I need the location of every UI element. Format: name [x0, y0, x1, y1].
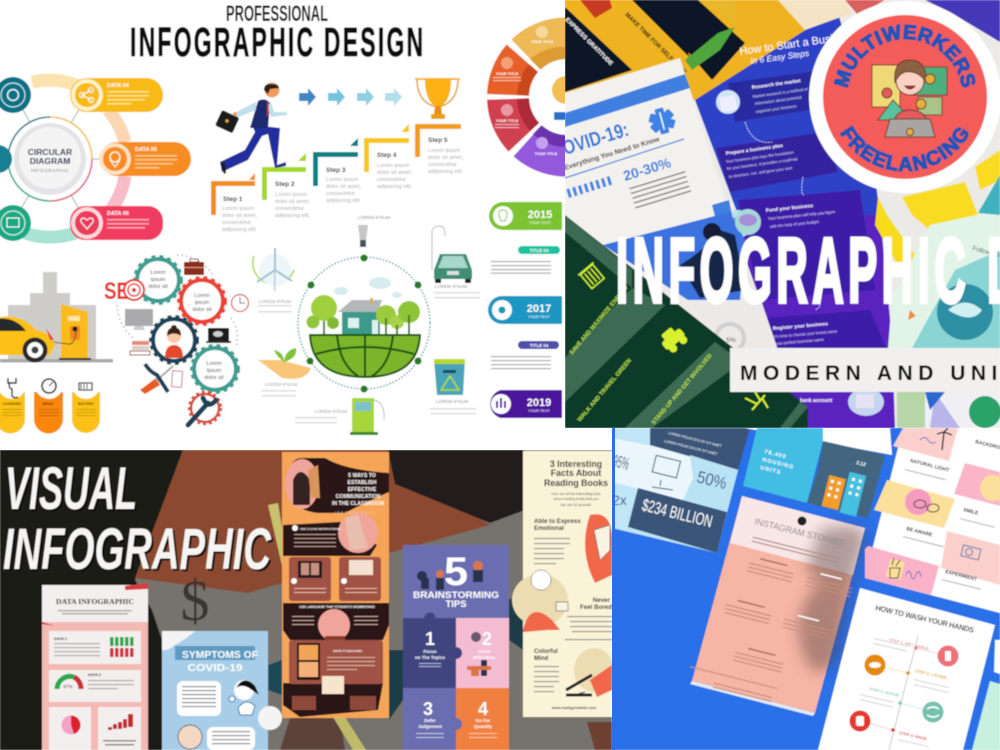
- puzzle piece 2: Wild Ideas: [473, 655, 496, 660]
- panel: visual infographic: INFOGRAPHIC: [3, 517, 272, 582]
- poster: 3 interesting facts about reading books: Facts About: [551, 468, 601, 478]
- circular diagram: INFOGRAPHIC: [31, 168, 69, 173]
- cell: camera: [941, 531, 1000, 585]
- lorem captions: LOREM IPSUM: [435, 284, 467, 289]
- covid card: OVID-19:: [560, 119, 631, 160]
- lorem captions: LOREM IPSUM: [436, 399, 468, 404]
- title: infographic: INFOGRAPHIC: [5, 519, 274, 584]
- gear: red: Lorem: [194, 293, 210, 299]
- step 4: consectetur: [377, 177, 406, 183]
- icon: tree: [745, 392, 768, 410]
- segment: yellow: [511, 16, 565, 70]
- puzzle piece 2: [450, 618, 509, 688]
- stat: $234 billion: $234 BILLION: [640, 495, 714, 531]
- gear: red: [178, 278, 226, 324]
- step: register your business: your perfect business name: [775, 337, 825, 346]
- icon: bulb: [358, 225, 368, 247]
- icon: recycle trash: [578, 262, 606, 290]
- capsule: battery: BATTERY: [78, 402, 95, 406]
- step 2: Lorem ipsum: [275, 192, 308, 198]
- data 04 pill: [70, 78, 163, 112]
- lorem captions: LOREM IPSUM: [265, 382, 297, 387]
- arrows: [299, 88, 402, 106]
- logo text: multiwerkers: MULTIWERKERS: [832, 23, 976, 89]
- section: data 2: 67%: [63, 684, 73, 689]
- icon: green car: [432, 226, 472, 283]
- statistics card: 50%: [695, 467, 729, 493]
- title: visual: VISUAL: [7, 457, 139, 524]
- big number five: 5: [444, 550, 468, 594]
- step 5: adipiscing elit.: [428, 169, 464, 175]
- speech bubble: [177, 681, 221, 716]
- poster: 3 interesting facts about reading books: can use for yourself.: [560, 503, 592, 507]
- step 3: Step 3: [326, 167, 346, 174]
- poster: data infographic: [42, 583, 148, 750]
- gear: teal top: Lorem: [150, 270, 166, 276]
- step 5: Lorem ipsum: [428, 148, 461, 154]
- capsule: speed: SPEED: [42, 402, 54, 406]
- capsule: charging: CHARGING: [3, 402, 22, 406]
- step 2: Step 2: [275, 181, 295, 188]
- poster: 3 interesting facts about reading books: Reading Books: [544, 478, 608, 488]
- green eco leaflet: SAVE AND MAXIMIZE ENERGY: [569, 285, 630, 356]
- yellow and dark leaflet: MAKE TIME FOR SELF-CARE: [624, 12, 687, 76]
- puzzle piece 4: [450, 688, 509, 750]
- lorem captions: [258, 215, 480, 424]
- icon: laptop: [206, 328, 231, 343]
- covid card: [560, 58, 732, 258]
- step 1: consectetur: [222, 220, 251, 226]
- cell: peace hand: [865, 546, 939, 595]
- poster: 3 interesting facts about reading books: Feel Bored: [580, 604, 612, 611]
- icon: monitor: [125, 309, 153, 330]
- electric car charging: [0, 272, 113, 362]
- blue card with person: [603, 209, 761, 300]
- 2019 banner: [490, 390, 562, 418]
- cell: yellow glasses: [874, 480, 955, 528]
- segment: purple: YOUR TITLE: [535, 152, 558, 156]
- trees and house: [306, 295, 420, 335]
- icon: hand with plant: [258, 348, 311, 379]
- heading: ESTABLISH: [347, 480, 377, 486]
- timeline: [488, 202, 562, 418]
- puzzle piece 1: 1: [425, 629, 435, 649]
- step: prepare a business plan: for your business. It provides a roadmap: [726, 156, 799, 171]
- step 2: consectetur: [275, 206, 304, 212]
- cell labels: SMILE: [963, 507, 979, 517]
- gear: teal lower: Ipsum: [207, 368, 222, 374]
- illustration: reader on chair: [585, 514, 612, 583]
- step: research the market: organize your business: [755, 103, 797, 114]
- green eco leaflet: [565, 215, 808, 428]
- title pill teal: [491, 246, 560, 274]
- title pill purple: [491, 341, 559, 369]
- feature capsules: [0, 371, 100, 434]
- poster: 5 ways to establish communication: MAKE IT ENGAGING: [333, 649, 363, 653]
- puzzle piece 4: Quantity: [474, 724, 493, 729]
- chart: bar: [98, 707, 141, 750]
- step 1: dolor sit amet,: [222, 213, 258, 219]
- step 3: adipiscing elit.: [326, 198, 362, 204]
- step 1: Lorem ipsum: [222, 206, 255, 212]
- doughnut note card: [640, 300, 778, 360]
- globe hemisphere: [310, 335, 420, 377]
- panel: visual infographic: VISUAL: [5, 455, 137, 522]
- cell labels: BE AWARE: [906, 526, 933, 539]
- gear: teal lower: Lorem: [206, 361, 222, 367]
- icon: dry: [850, 710, 870, 732]
- step 4: [364, 124, 413, 190]
- puzzle piece 1: Focus: [423, 649, 437, 654]
- mint card: [972, 681, 1000, 750]
- housing units card: [743, 428, 892, 518]
- section: data 2: [49, 670, 141, 702]
- yellow and dark leaflet: [564, 0, 805, 100]
- housing units card: 2.12: [856, 460, 867, 468]
- step: research the market: information about potential: [754, 94, 802, 106]
- icon: freelancer character: [872, 60, 947, 137]
- gear: navy with person: [150, 316, 198, 364]
- icon: buildings: [821, 467, 866, 517]
- logo: multiwerkers freelancing: [808, 0, 1000, 193]
- step: prepare a business plan: [716, 132, 838, 192]
- icon: car: [657, 323, 690, 355]
- 2015 banner: 2015: [528, 209, 552, 221]
- puzzle piece 3: Judgement: [418, 724, 442, 729]
- panel: professional infographic design: [0, 0, 594, 450]
- title pill teal: TITLE 04: [530, 248, 549, 253]
- statistics card: 2x: [612, 492, 627, 508]
- bottom strip collage: bank account: [800, 398, 833, 404]
- puzzle piece 4: Go For: [476, 718, 491, 723]
- data 05 pill: DATA 05: [135, 147, 157, 153]
- cell labels: EXPERIMENT: [945, 569, 978, 583]
- heading: [332, 473, 384, 507]
- step: register your business: It's time to choose your brand name: [774, 328, 838, 339]
- statistics card: LOREM IPSUM DOLOR SIT AMET: [664, 439, 719, 456]
- white card corner: [994, 640, 1000, 674]
- icon: briefcase: [184, 259, 204, 275]
- tips grid card: [865, 428, 1000, 613]
- people illustration: [417, 561, 491, 676]
- puzzle piece 1: [403, 612, 462, 688]
- clouds: [334, 277, 402, 298]
- heading: 5 WAYS TO: [348, 473, 376, 479]
- blue business steps poster: How to Start a Business: [739, 30, 857, 58]
- icon: left node: [0, 145, 12, 173]
- icon: light bulb: [551, 76, 565, 121]
- desk background shapes: [0, 450, 612, 750]
- section: data 1: DATA 1: [54, 637, 67, 641]
- 2015 banner: [489, 202, 562, 230]
- gear: teal top: Ipsum: [151, 277, 166, 283]
- heading: IN THE CLASSROOM: [332, 501, 384, 507]
- step 3: consectetur: [326, 191, 355, 197]
- heading: EFFECTIVE: [348, 487, 377, 493]
- icon: mail node: [0, 205, 31, 241]
- poster: 3 interesting facts about reading books: Here are all the interesting facts: [551, 492, 601, 496]
- cell: pink flower: [954, 463, 1000, 506]
- icon: running businessman: [215, 82, 287, 174]
- title: professional: PROFESSIONAL: [226, 1, 328, 26]
- poster: 3 interesting facts about reading books: about reading books that you: [553, 497, 599, 501]
- illustration: relaxed reader: [566, 648, 614, 697]
- car: [0, 316, 55, 362]
- data 06 pill: DATA 06: [107, 211, 129, 217]
- poster: 5 brainstorming tips: TIPS: [445, 599, 467, 610]
- icon: lather: [864, 654, 886, 676]
- step: fund your business: with the help of your budget: [770, 219, 820, 229]
- title: BRAINSTORMING: [413, 590, 499, 601]
- puzzle piece 3: Defer: [424, 718, 436, 723]
- step: prepare a business plan: to structure, run, and grow your own: [728, 165, 793, 179]
- subtitle band: [730, 348, 1000, 392]
- housing units card: HOUSING: [762, 457, 795, 471]
- panel: multiwerkers collage: [565, 0, 1000, 428]
- yellow and dark leaflet: EXPRESS GRATITUDE: [564, 17, 613, 67]
- connector paths: [745, 122, 820, 310]
- step 5: consectetur: [428, 162, 457, 168]
- desk background shapes: $: [180, 568, 210, 633]
- puzzle piece 4: 4: [478, 699, 488, 719]
- icon: monitor: [652, 455, 681, 490]
- housing units card: UNITS: [760, 465, 782, 476]
- segment: red: [487, 98, 539, 152]
- step: research the market: Market research is a method of: [752, 86, 809, 99]
- gear: red: ipsum: [195, 300, 210, 306]
- poster: symptoms of covid-19: [162, 631, 282, 750]
- 2017 banner: [488, 296, 562, 324]
- section: data 1: [49, 631, 141, 664]
- title: infographic design: INFOGRAPHIC DESIGN: [130, 20, 425, 66]
- poster: 3 interesting facts about reading books: Mind: [534, 655, 549, 662]
- icon: fuel pump: [350, 398, 384, 435]
- title pill purple: TITLE 04: [530, 343, 549, 348]
- speech bubble lower: [207, 727, 255, 750]
- icon: target: [124, 280, 144, 300]
- heading: COMMUNICATION: [336, 494, 381, 500]
- panel: blue infographic templates: [611, 428, 1000, 750]
- poster: 5 brainstorming tips: [403, 545, 509, 750]
- poster: 3 interesting facts about reading books: [512, 451, 614, 717]
- eco globe diagram: [253, 215, 480, 435]
- icon: trophy: [415, 79, 460, 119]
- step 1: [211, 173, 258, 233]
- poster title: INSTAGRAM STORIES: [754, 516, 845, 548]
- circular diagram: [0, 77, 191, 241]
- segment: orange: YOUR TITLE: [496, 72, 519, 76]
- icon: sick girl: [229, 680, 259, 715]
- gear: teal top: [134, 256, 182, 304]
- puzzle piece 3: [403, 688, 462, 750]
- icon: rinse: [922, 702, 944, 722]
- gear: teal lower: dolor sit: [204, 375, 224, 381]
- gear: red: dolor sit: [192, 307, 212, 313]
- icon: soap: [938, 646, 958, 666]
- circular diagram: DIAGRAM: [30, 156, 70, 166]
- lorem captions: LOREM IPSUM: [315, 409, 347, 414]
- icon: gear node: [0, 77, 31, 113]
- cell labels: NATURAL LIGHT: [910, 458, 950, 474]
- step 2: adipiscing elit.: [275, 213, 311, 219]
- step captions: STEP 1: WET HANDS: [889, 637, 930, 651]
- puzzle piece 2: 2: [482, 629, 492, 649]
- step 3: Lorem ipsum: [326, 177, 359, 183]
- poster: 3 interesting facts about reading books: Emotional: [534, 525, 564, 532]
- blue business steps poster: [695, 10, 895, 428]
- radial pie diagram: [486, 16, 565, 178]
- icon: wrench and screwdriver: [140, 364, 183, 394]
- step 4: Step 4: [377, 152, 397, 159]
- data 06 pill: [70, 206, 163, 240]
- illustration: reader with tea: [512, 570, 568, 632]
- poster: how to wash your hands: [818, 588, 995, 750]
- 2019 banner: 2019: [527, 397, 551, 409]
- step captions: [869, 637, 947, 741]
- poster: instagram stories: [687, 496, 866, 716]
- step captions: STEP 3: SCRUB: [869, 686, 900, 698]
- 2019 banner: YOUR TEXT: [528, 409, 551, 413]
- icon: windmill: [253, 248, 294, 291]
- blue business steps poster: in 6 Easy Steps: [750, 48, 811, 66]
- icon: medical star: [646, 105, 678, 137]
- poster: 3 interesting facts about reading books: Able to Express: [534, 518, 581, 525]
- step 3: [313, 138, 362, 204]
- poster: 3 interesting facts about reading books: 3 Interesting: [550, 459, 602, 469]
- 2015 banner: YOUR TEXT: [529, 221, 552, 225]
- row cards: [289, 525, 381, 601]
- statistics card: 95%: [611, 451, 631, 474]
- logo text: freelancing: FREELANCING: [839, 124, 970, 172]
- step: fund your business: Your business plan will help you figure: [768, 209, 836, 221]
- poster: 3 interesting facts about reading books: www.reallygreatsite.com: [551, 706, 597, 710]
- step 4: Lorem ipsum: [377, 163, 410, 169]
- segment: purple: [513, 124, 565, 178]
- step 2: [262, 153, 311, 219]
- cell: palm: [893, 428, 958, 461]
- step 5: Step 5: [428, 137, 448, 144]
- icon: bald man: [178, 725, 202, 749]
- segment: red: YOUR TITLE: [496, 119, 519, 123]
- green eco leaflet: WALK AND TRAVEL GREEN: [577, 358, 633, 423]
- housing units card: 78,400: [764, 449, 787, 460]
- poster: symptoms of covid-19: SYMPTOMS OF: [182, 649, 259, 661]
- step captions: STEP 4: RINSE: [899, 730, 928, 741]
- covid card: Everything You Need to Know: [564, 136, 661, 172]
- gears seo diagram: [104, 255, 248, 425]
- step 5: dolor sit amet,: [428, 155, 464, 161]
- step: research the market: Research the market: [751, 78, 801, 91]
- gear: teal top: dolor sit: [148, 284, 168, 290]
- poster: 5 ways to establish communication: USE LANGUAGE THAT STUDENTS UNDERSTAND: [299, 605, 376, 609]
- covid card: 20-30%: [621, 154, 673, 184]
- lorem captions: LOREM IPSUM: [259, 299, 291, 304]
- step 1: Step 1: [223, 196, 243, 203]
- step: prepare a business plan: Your business plan lays the foundation: [725, 150, 794, 164]
- segment: yellow: YOUR TITLE: [531, 40, 554, 44]
- data 04 pill: DATA 04: [107, 83, 130, 89]
- poster: 5 ways to establish communication: INFOGRAPHIC: [335, 511, 375, 515]
- puzzle piece 3: 3: [423, 699, 433, 719]
- gear: teal lower: [192, 346, 238, 392]
- doughnut note card: 5%: [726, 337, 736, 344]
- step: prepare a business plan: Prepare a business plan: [725, 143, 783, 157]
- statistics card: LOREM IPSUM DOLOR SIT AMET: [668, 431, 723, 448]
- step: fund your business: Fund your business: [766, 203, 814, 214]
- circular diagram: CIRCULAR: [28, 147, 72, 157]
- green eco leaflet: STAND UP AND GET INVOLVED: [651, 353, 714, 426]
- quadrant seam lines: [565, 428, 615, 750]
- poster text blocks: [687, 548, 854, 714]
- puzzle piece 1: on The Topics: [415, 655, 446, 660]
- poster: data infographic: DATA INFOGRAPHIC: [56, 597, 134, 606]
- data 05 pill: [99, 142, 191, 176]
- poster: 3 interesting facts about reading books: Colorful: [534, 648, 558, 655]
- poster: symptoms of covid-19: COVID-19: [188, 662, 243, 674]
- step 4: adipiscing elit.: [377, 184, 413, 190]
- right side yellow strips: Follow up: [971, 245, 1000, 259]
- step 1: adipiscing elit.: [222, 227, 258, 233]
- step: register your business: Register your business: [773, 321, 828, 332]
- icon: recycle bin: [434, 359, 465, 395]
- 2017 banner: YOUR TEXT: [528, 315, 551, 319]
- icon: clock: [232, 294, 248, 312]
- puzzle piece 2: Avoid: [478, 649, 490, 654]
- segment: orange: [487, 44, 538, 96]
- step 4: dolor sit amet,: [377, 170, 413, 176]
- gear: red wrench: [188, 392, 221, 425]
- stepped staircase: [211, 124, 464, 233]
- seo label: SE: [104, 278, 129, 305]
- poster: 3 interesting facts about reading books: Never: [593, 597, 611, 604]
- right side yellow strips: [778, 0, 1000, 348]
- step: fund your business: [724, 190, 875, 300]
- icon: books: [130, 341, 150, 355]
- cell labels: [906, 439, 1000, 583]
- statistics card: [611, 428, 750, 553]
- step: register your business: [767, 310, 886, 360]
- row cards: USE CLEAR INSTRUCTIONS: [300, 527, 341, 531]
- panel: visual infographic: [0, 450, 614, 750]
- poster: 5 ways to establish communication: [282, 452, 389, 718]
- chart: pie: [49, 707, 91, 750]
- step 3: dolor sit amet,: [326, 184, 362, 190]
- step captions: STEP 2: LATHER: [915, 668, 947, 680]
- charger: [53, 304, 91, 360]
- step 5: [415, 124, 464, 175]
- step: research the market: [716, 71, 822, 122]
- lorem captions: LOREM IPSUM: [358, 215, 390, 220]
- 2017 banner: 2017: [527, 303, 551, 315]
- bottom strip collage: [800, 388, 1000, 428]
- step 2: dolor sit amet,: [275, 199, 311, 205]
- section: data 2: DATA 2: [88, 673, 101, 677]
- poster title: HOW TO WASH YOUR HANDS: [875, 603, 976, 635]
